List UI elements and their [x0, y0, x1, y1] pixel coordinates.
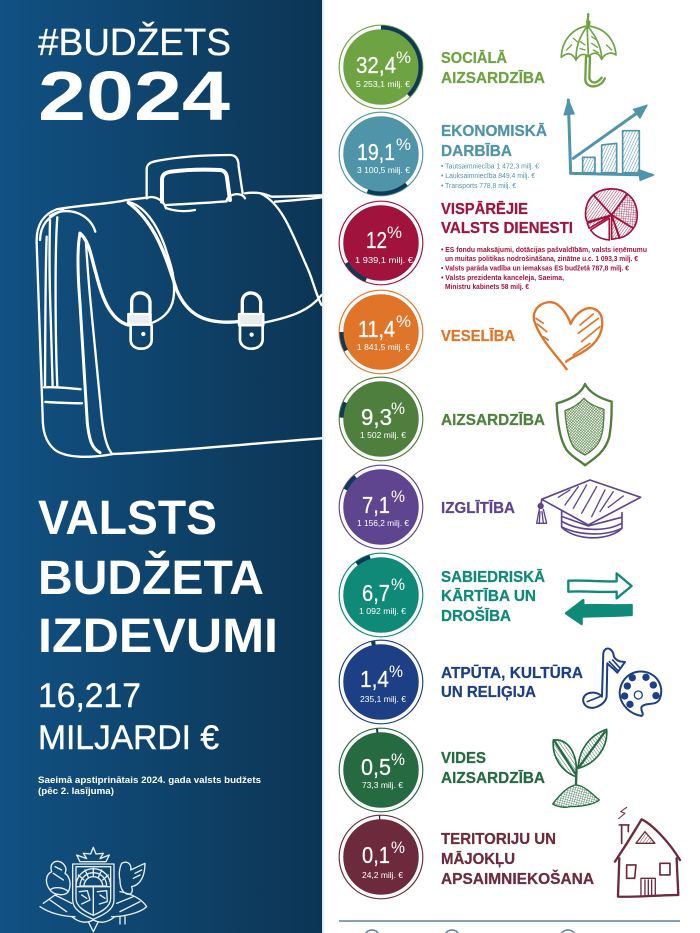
gauge: 12%: 1 939,1 milj. €	[355, 255, 413, 265]
icon: coat of arms	[40, 847, 147, 932]
gauge: 6,7%	[326, 540, 436, 650]
breakdown list	[441, 247, 647, 291]
gauge: 6,7%: 1 092 milj. €	[359, 606, 406, 616]
total amount: MILJARDI €	[38, 719, 219, 757]
label: KĀRTĪBA UN	[441, 586, 536, 605]
total amount: 16,217	[38, 677, 141, 715]
label: DARBĪBA	[441, 141, 512, 160]
gauge: 12%: 12	[366, 227, 387, 253]
breakdown list: • ES fondu maksājumi, dotācijas pašvaldībām, valsts ieņēmumu	[441, 247, 647, 254]
gauge: 32,4%	[339, 25, 423, 109]
breakdown list: Ministru kabinets 58 milj. €	[445, 284, 529, 291]
gauge: 32,4%: %	[396, 48, 411, 67]
breakdown list	[441, 164, 539, 190]
icon: music note and palette	[583, 648, 661, 716]
item: sociālā aizsardzība	[339, 14, 616, 109]
gauge: 0,5%: 0,5	[361, 754, 391, 780]
icon: graduation cap	[537, 480, 641, 538]
footer divider and cropped legend circles	[339, 921, 680, 933]
gauge: 32,4%: 32,4	[356, 52, 396, 78]
gauge: 9,3%	[339, 377, 423, 461]
gauge: 1,4%: 235,1 milj. €	[360, 694, 406, 704]
icon: briefcase	[37, 155, 322, 457]
total amount	[38, 677, 219, 757]
icon: pie chart	[586, 189, 637, 240]
gauge: 11,4%: 11,4	[358, 316, 395, 342]
label: VALSTS DIENESTI	[441, 220, 573, 237]
gauge: 11,4%	[328, 279, 434, 385]
icon: umbrella	[561, 14, 616, 86]
gauge: 12%	[330, 192, 432, 294]
label	[441, 48, 545, 87]
label: VIDES	[441, 750, 486, 767]
label: ATPŪTA, KULTŪRA	[441, 663, 583, 682]
gauge: 19,1%: %	[396, 135, 411, 154]
label: IZGLĪTĪBA	[441, 498, 515, 517]
gauge: 12%: %	[387, 223, 402, 242]
icon: shield	[557, 384, 612, 465]
gauge: 0,5%: %	[391, 750, 405, 769]
item: veselība	[328, 279, 602, 385]
gauge: 9,3%: 1 502 milj. €	[360, 430, 406, 440]
gauge: 7,1%	[328, 454, 434, 560]
item: teritoriju un mājokļu apsaimniekošana	[339, 807, 680, 899]
label: MĀJOKĻU	[441, 849, 515, 868]
icon: two arrows	[566, 573, 632, 624]
source note: Saeimā apstiprinātais 2024. gada valsts budžets	[38, 775, 261, 785]
label: DROŠĪBA	[441, 606, 511, 625]
heading: valsts budžeta izdevumi: BUDŽETA	[38, 550, 264, 605]
gauge: 0,1%: 24,2 milj. €	[362, 870, 403, 880]
gauge: 1,4%: 1,4	[360, 666, 389, 692]
icon: heart	[534, 302, 602, 369]
item: aizsardzība	[339, 377, 612, 465]
gauge: 0,1%: 0,1	[362, 842, 390, 868]
title: hashtag: #BUDŽETS	[38, 21, 231, 64]
gauge: 0,5%: 73,3 milj. €	[362, 780, 403, 790]
gauge: 0,1%: %	[391, 838, 405, 857]
gauge: 6,7%: %	[391, 575, 405, 594]
icon: growth chart	[564, 99, 654, 181]
breakdown list: • Valsts prezidenta kanceleja, Saeima,	[441, 275, 564, 282]
gauge: 0,5%	[337, 726, 425, 814]
item: izglītība	[328, 454, 641, 560]
label: EKONOMISKĀ	[441, 121, 547, 140]
item: vides aizsardzība	[337, 726, 607, 814]
label	[441, 663, 583, 701]
label: SOCIĀLĀ	[441, 48, 507, 67]
label	[441, 831, 594, 888]
gauge: 19,1%: 3 100,5 milj. €	[357, 165, 410, 175]
breakdown list: • Valsts parāda vadība un iemaksas ES budžetā 787,8 milj. €	[441, 266, 629, 272]
gauge: 1,4%: %	[389, 662, 403, 681]
gauge: 32,4%: 5 253,1 milj. €	[356, 79, 410, 89]
label: AIZSARDZĪBA	[441, 68, 545, 87]
gauge: 9,3%: %	[391, 399, 405, 418]
icon: plant	[553, 729, 607, 807]
label: TERITORIJU UN	[441, 831, 556, 848]
source note: (pēc 2. lasījuma)	[38, 786, 114, 796]
label: VESELĪBA	[441, 326, 515, 345]
heading: valsts budžeta izdevumi	[38, 492, 278, 663]
label	[441, 121, 547, 160]
title: year: 2024	[38, 57, 230, 135]
gauge: 19,1%: 19,1	[357, 139, 395, 165]
label: UN RELIĢIJA	[441, 684, 536, 701]
breakdown list: • Lauksaimniecība 849,4 milj. €	[441, 173, 535, 180]
panel: left budget panel	[0, 0, 324, 933]
gauge: 7,1%: 1 156,2 milj. €	[357, 518, 409, 528]
gauge: 19,1%	[325, 98, 437, 210]
label: AIZSARDZĪBA	[441, 410, 545, 429]
gauge: 9,3%: 9,3	[361, 404, 392, 430]
icon: house	[615, 807, 680, 897]
source note	[38, 775, 261, 796]
item: ekonomiskā darbība	[325, 98, 654, 210]
heading: valsts budžeta izdevumi: VALSTS	[38, 492, 217, 545]
gauge: 1,4%	[333, 634, 429, 730]
gauge: 6,7%: 6,7	[362, 580, 390, 606]
breakdown list: • Transports 778,8 milj. €	[441, 183, 516, 190]
heading: valsts budžeta izdevumi: IZDEVUMI	[38, 610, 278, 663]
label	[441, 567, 545, 625]
gauge: 0,1%	[339, 815, 423, 899]
item: sabiedriskā kārtība un drošība	[326, 540, 632, 650]
label: AIZSARDZĪBA	[441, 768, 545, 787]
label: APSAIMNIEKOŠANA	[441, 869, 594, 888]
breakdown list: • Tautsaimniecība 1 472,3 milj. €	[441, 164, 539, 170]
label	[441, 750, 545, 787]
gauge: 11,4%: %	[396, 312, 411, 331]
breakdown list: un muitas politikas nodrošināšana, zinātne u.c. 1 093,3 milj. €	[445, 256, 638, 263]
label	[441, 199, 573, 237]
item: vispārējie valsts dienesti	[330, 189, 647, 294]
label: VISPĀRĒJIE	[441, 199, 528, 218]
gauge: 7,1%: 7,1	[362, 492, 390, 518]
item: atpūta, kultūra un reliģija	[333, 634, 661, 730]
gauge: 7,1%: %	[391, 487, 405, 506]
gauge: 11,4%: 1 841,5 milj. €	[357, 342, 410, 352]
label: SABIEDRISKĀ	[441, 567, 545, 586]
